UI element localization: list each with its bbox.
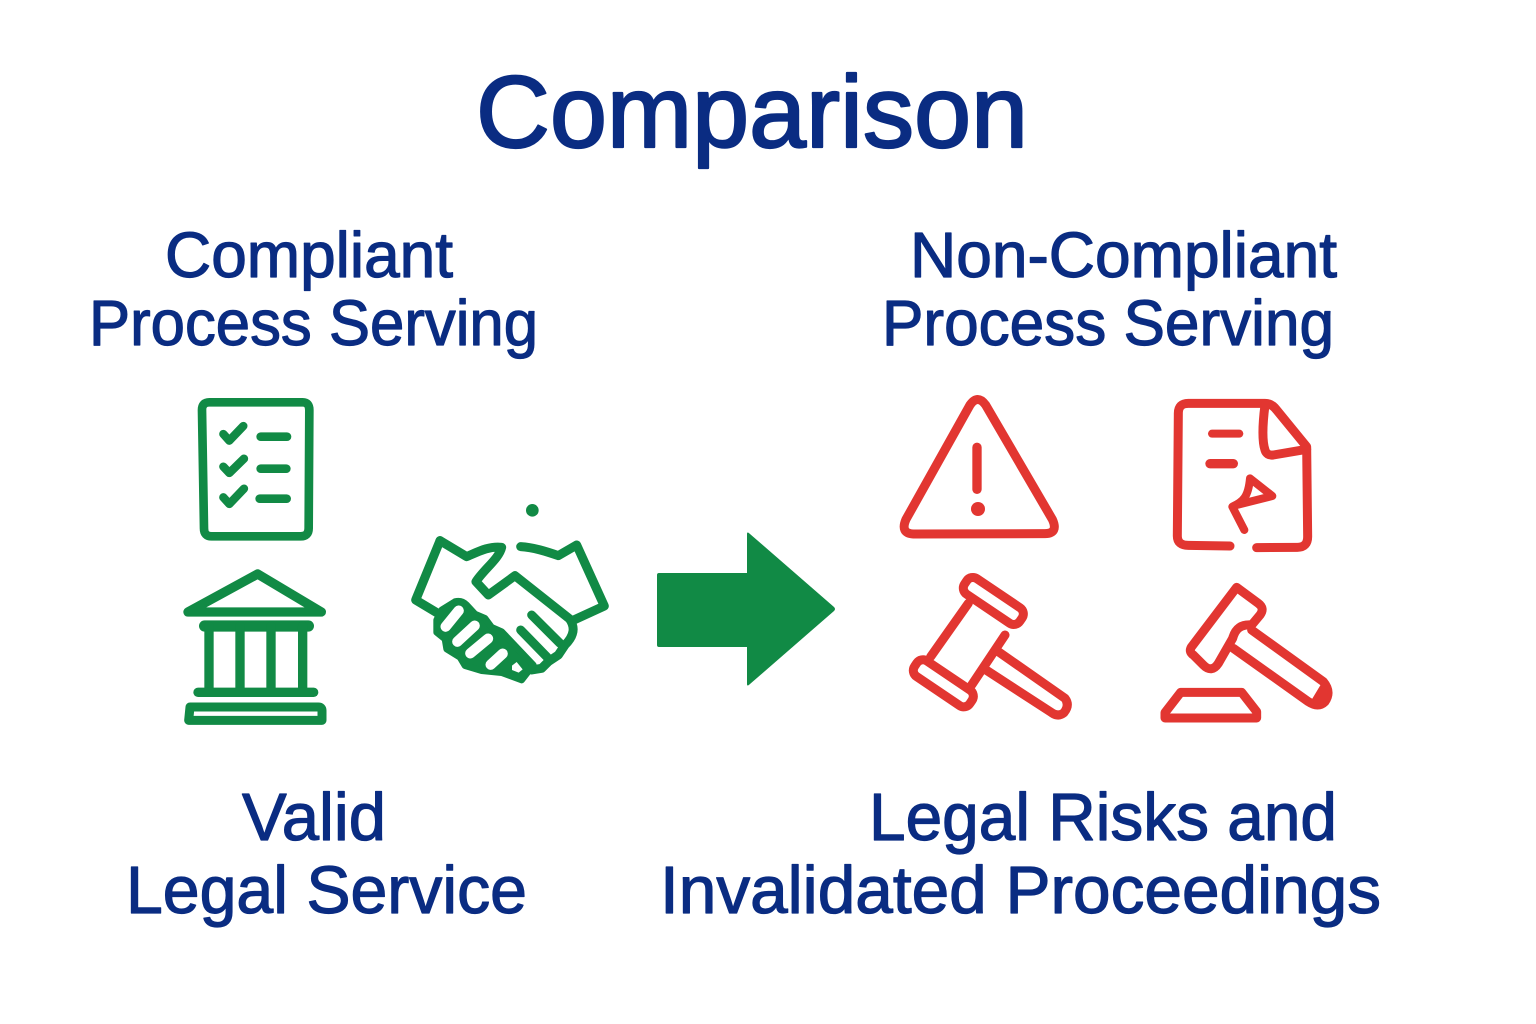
label: legal risks and invalidated proceedings: Legal Risks and: [869, 780, 1337, 855]
label: valid legal service: Valid: [242, 780, 386, 855]
arrow: [657, 532, 835, 686]
icon: damaged document: [1177, 403, 1308, 548]
icon: warning triangle: [904, 399, 1054, 534]
title: Comparison: [476, 55, 1028, 169]
label: valid legal service: Legal Service: [126, 853, 527, 928]
icon: checklist: [202, 402, 309, 536]
icon group: compliant icons: [188, 402, 604, 720]
icon: courthouse: [188, 574, 322, 720]
icon: gavel: [910, 575, 1067, 715]
heading: non-compliant process serving: Non-Compliant: [910, 219, 1337, 291]
heading: compliant process serving: Compliant: [165, 219, 453, 291]
label: valid legal service: [126, 780, 527, 928]
label: legal risks and invalidated proceedings: [660, 780, 1381, 928]
icon: handshake: [416, 504, 604, 680]
heading: non-compliant process serving: [882, 219, 1337, 359]
heading: non-compliant process serving: Process Serving: [882, 287, 1334, 359]
heading: compliant process serving: Process Serving: [89, 287, 538, 359]
label: legal risks and invalidated proceedings: Invalidated Proceedings: [660, 853, 1381, 928]
icon group: non-compliant icons: [904, 399, 1328, 718]
heading: compliant process serving: [89, 219, 538, 359]
icon: gavel with block: [1165, 587, 1328, 718]
